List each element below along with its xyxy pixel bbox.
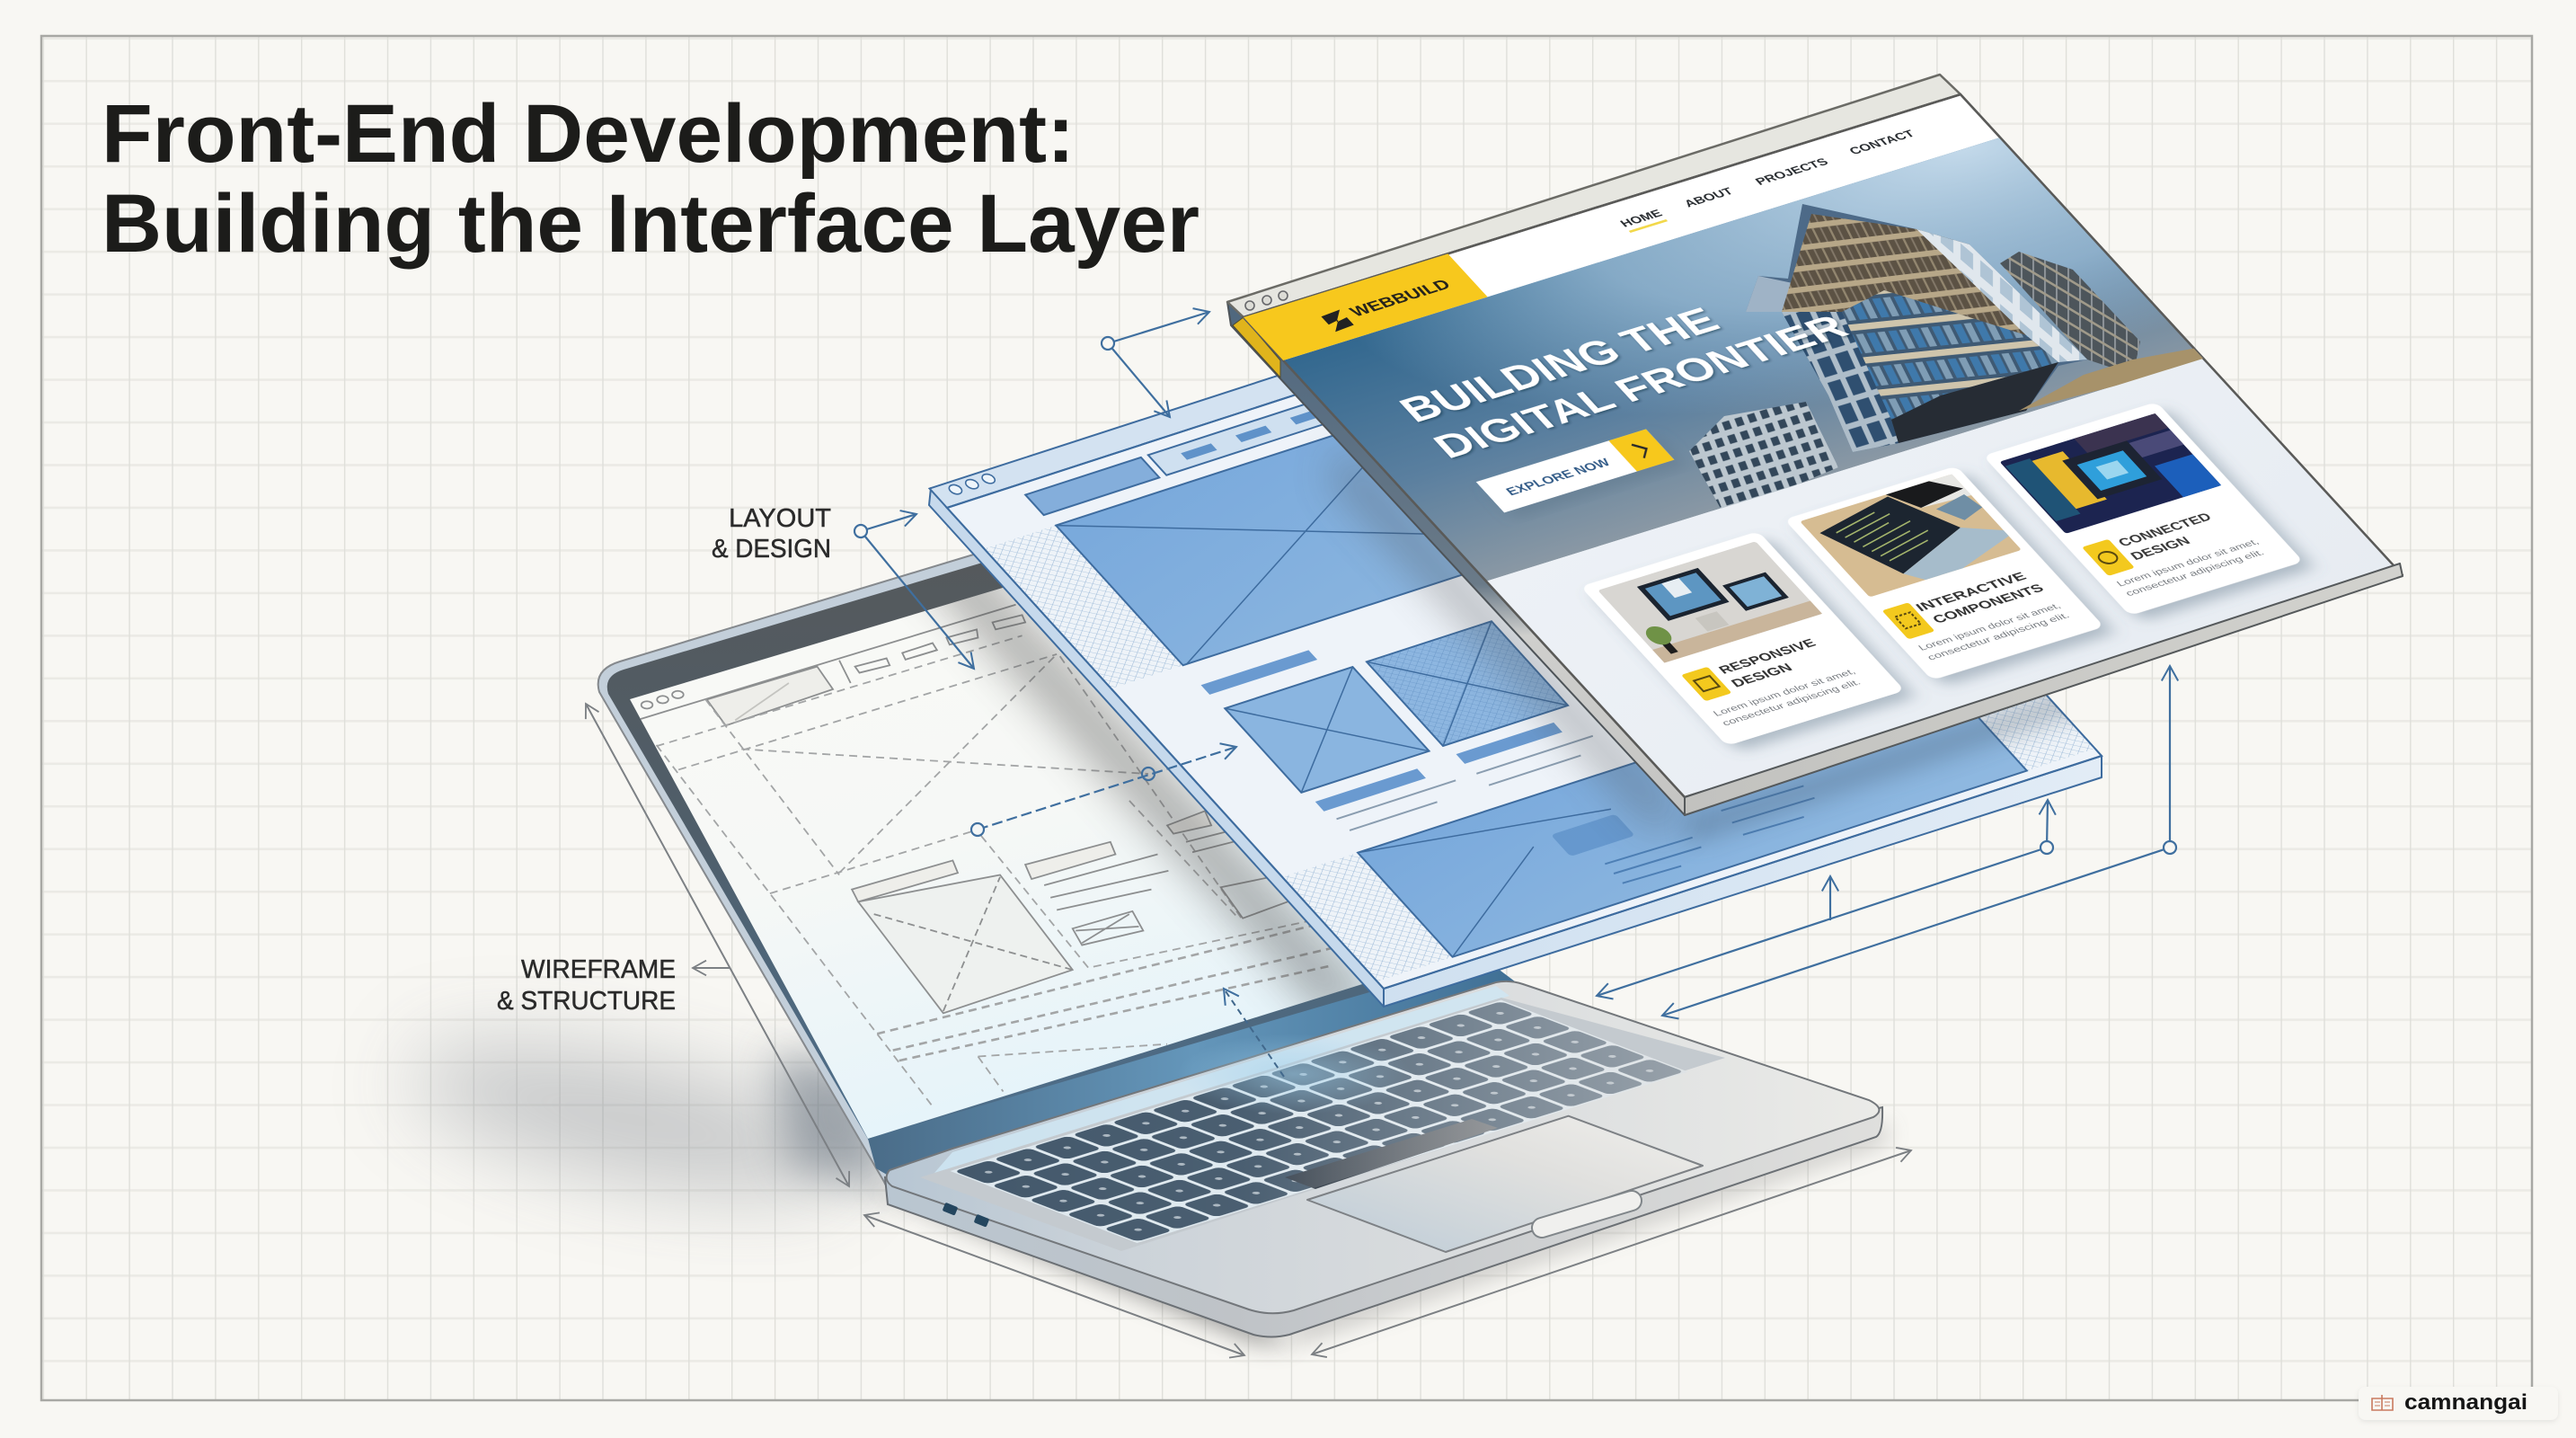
side ports: [943, 1203, 989, 1228]
wire text rows: [1314, 715, 1604, 832]
card: responsive design: Lorem ipsum dolor sit amet,: [1712, 668, 1858, 718]
wire nav bar: [1148, 288, 1684, 475]
card: interactive components: COMPONENTS: [1930, 582, 2047, 626]
layer shadow falling on the screen: [923, 588, 1362, 1008]
grey dimension arrows: [586, 704, 1911, 1355]
watermark badge: camnangai: [2404, 1390, 2527, 1415]
label: layout and design: LAYOUT: [729, 504, 831, 533]
hero headline: DIGITAL FRONTIER: [1425, 308, 1856, 466]
card: responsive design: [1580, 531, 1905, 746]
hero headline: BUILDING THE: [1391, 301, 1729, 430]
wireframe drawn on laptop screen: [641, 605, 1363, 1108]
left side face: [1227, 302, 1685, 815]
connector: lower right two: [1662, 666, 2176, 1016]
dashed arrow between laptop keyboard and screen: [1224, 989, 1284, 1077]
nav menu: CONTACT: [1846, 128, 1917, 156]
thumb notch: [1542, 1201, 1632, 1228]
wire bottom block: [1358, 666, 2027, 957]
keyboard well: [920, 998, 1725, 1251]
laptop ground shadows: [397, 1014, 1887, 1344]
label: wireframe and structure: [497, 955, 676, 1016]
card: responsive design: DESIGN: [1729, 661, 1795, 690]
nav logo block: [1244, 253, 1488, 360]
card: connected design: consectetur adipiscing elit.: [2124, 548, 2267, 598]
wire image box one: [1225, 667, 1430, 793]
middle layer: layout and design: [927, 376, 2103, 1007]
laptop screen: [630, 539, 1492, 1139]
card: connected design: Lorem ipsum dolor sit amet,: [2115, 537, 2262, 589]
far right building: [2000, 252, 2140, 375]
icon: open book: [2372, 1395, 2393, 1410]
hero button: EXPLORE NOW: [1503, 457, 1614, 498]
label: wireframe and structure: WIREFRAME: [521, 955, 676, 984]
wire hero block: [1056, 315, 1829, 665]
title: Building the Interface Layer: [102, 178, 1199, 270]
card: interactive components: [1784, 466, 2104, 680]
laptop hinge chin: [868, 957, 1518, 1175]
wire title bar: [1201, 650, 1317, 695]
card: responsive design: RESPONSIVE: [1716, 637, 1819, 677]
card: interactive components: consectetur adipiscing elit.: [1925, 611, 2072, 662]
connector: wireframe to layout dashed: [971, 747, 1236, 836]
nav menu: ABOUT: [1681, 185, 1736, 209]
nav logo block: WEBBUILD: [1346, 277, 1455, 320]
shadow cast by the website layer: [1319, 444, 2074, 850]
nav menu: [1616, 128, 1922, 233]
card: connected design: [1983, 402, 2304, 616]
title: Front-End Development:: [102, 88, 1075, 180]
blue connector arrows: [854, 312, 2176, 1016]
card: responsive design: consectetur adipiscing elit.: [1720, 678, 1863, 728]
yellow bevel: [1233, 317, 1280, 377]
horizon strip: [2019, 348, 2210, 411]
card: interactive components: INTERACTIVE: [1913, 571, 2030, 614]
card: connected design: CONNECTED: [2116, 511, 2215, 549]
browser chrome bar: [1227, 75, 1961, 317]
hatched margins: [984, 525, 1184, 688]
small front building: [1689, 402, 1838, 515]
label: layout and design: [712, 504, 831, 564]
connector: lower right one: [1597, 800, 2053, 996]
connector: layout label: [854, 514, 974, 669]
card: connected design: DESIGN: [2128, 535, 2193, 563]
card: interactive components: Lorem ipsum dolor sit amet,: [1917, 602, 2063, 652]
keyboard keys: [951, 1000, 1688, 1243]
main tower: [1746, 204, 2087, 452]
laptop base: [885, 981, 1882, 1337]
label: wireframe and structure: & STRUCTURE: [497, 987, 676, 1016]
watermark badge: [2359, 1387, 2558, 1420]
connector: website to layout, upper: [1102, 312, 1209, 417]
laptop illustration: [598, 512, 1882, 1337]
trackpad: [1307, 1116, 1703, 1252]
layer side faces: [929, 488, 2102, 1007]
hero building photo: [1689, 204, 2210, 515]
top layer: finished website: [1227, 75, 2403, 815]
page background and hero gradient: [1244, 94, 2402, 797]
layer face: [930, 256, 2102, 989]
nav menu: PROJECTS: [1752, 155, 1831, 187]
bottom side face: [1685, 564, 2403, 815]
wire image box two: [1367, 621, 1568, 746]
label: layout and design: & DESIGN: [712, 535, 831, 564]
hero button: [1476, 429, 1674, 512]
laptop lid: [598, 539, 1527, 1191]
page foreground content: [1244, 114, 2310, 768]
nav menu: HOME: [1617, 208, 1665, 229]
title: [102, 88, 1199, 270]
wire logo block: [1025, 457, 1159, 515]
glow at hinge: [934, 986, 1509, 1173]
